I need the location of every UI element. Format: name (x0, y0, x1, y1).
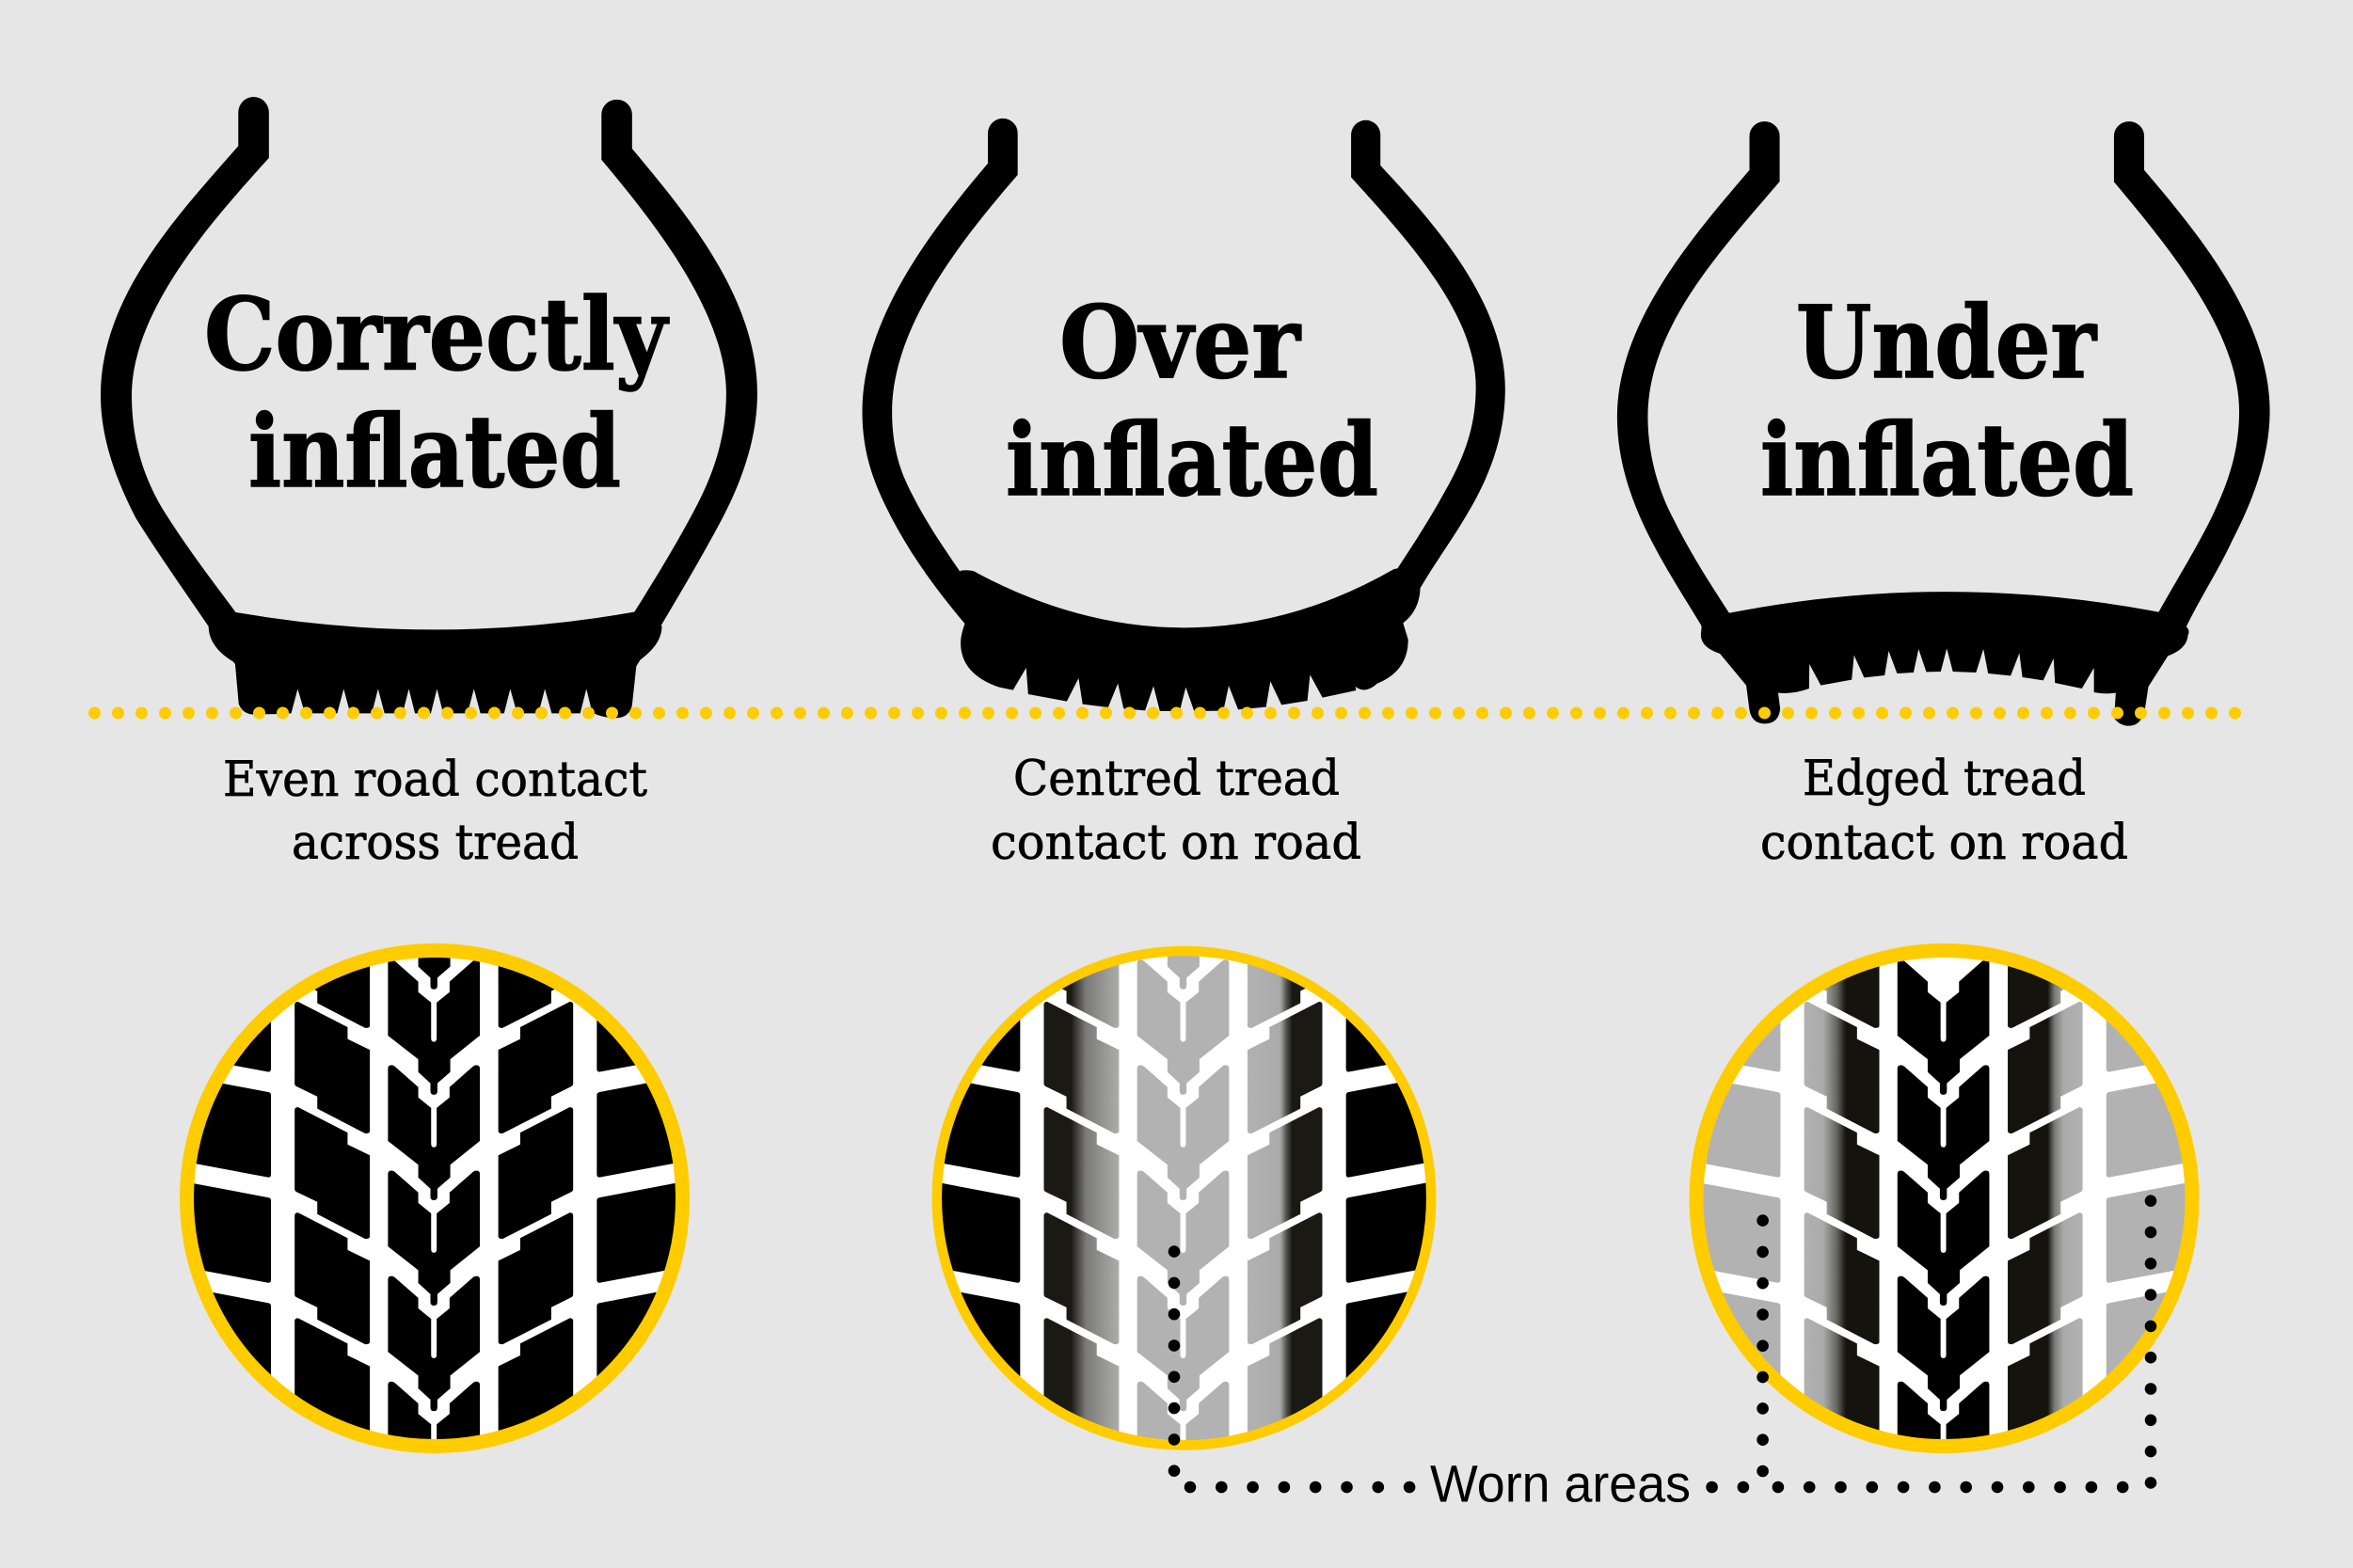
caption: even road contact: Even road contact (223, 752, 647, 808)
tread base: edged contact (1698, 592, 2189, 726)
caption: edged tread contact (1760, 752, 2128, 871)
caption: centred tread contact: Centred tread (1013, 752, 1340, 807)
panel: under inflated tyre (1617, 121, 2270, 871)
tread circle: under inflated, edges worn (1690, 943, 2200, 1453)
tread circle: over inflated, centre worn (931, 946, 1436, 1450)
heading: Under inflated: inflated (1760, 401, 2134, 518)
tyre walls: under inflated (1617, 121, 2270, 669)
heading: Correctly inflated (204, 275, 670, 510)
label: Worn areas: Worn areas (1430, 1454, 1691, 1513)
panel: over inflated tyre (863, 119, 1505, 871)
caption: edged tread contact: Edged tread (1803, 752, 2086, 807)
heading: Over inflated: inflated (1006, 401, 1378, 518)
tread base: centred contact (950, 568, 1421, 711)
heading: Under inflated: Under (1796, 283, 2097, 401)
caption: centred tread contact: contact on road (991, 816, 1361, 871)
leader: to under inflated tread (1712, 1201, 2151, 1487)
heading: Under inflated (1760, 283, 2134, 518)
caption: edged tread contact: contact on road (1760, 816, 2128, 871)
caption: even road contact (223, 752, 647, 871)
heading: Correctly inflated: Correctly (204, 275, 670, 393)
tread base: even contact (209, 612, 662, 718)
heading: Correctly inflated: inflated (248, 392, 621, 510)
heading: Over inflated (1006, 283, 1378, 518)
road line: yellow dotted (94, 707, 2235, 719)
tread circle: correctly inflated, even wear (180, 943, 690, 1453)
caption: even road contact: across tread (292, 816, 579, 871)
panel: correctly inflated tyre (101, 97, 757, 871)
tyre walls: correctly inflated (101, 97, 757, 642)
heading: Over inflated: Over (1059, 283, 1301, 401)
leader: to over inflated tread (1174, 1252, 1411, 1487)
tyre walls: over inflated (863, 119, 1505, 624)
caption: centred tread contact (991, 752, 1361, 871)
